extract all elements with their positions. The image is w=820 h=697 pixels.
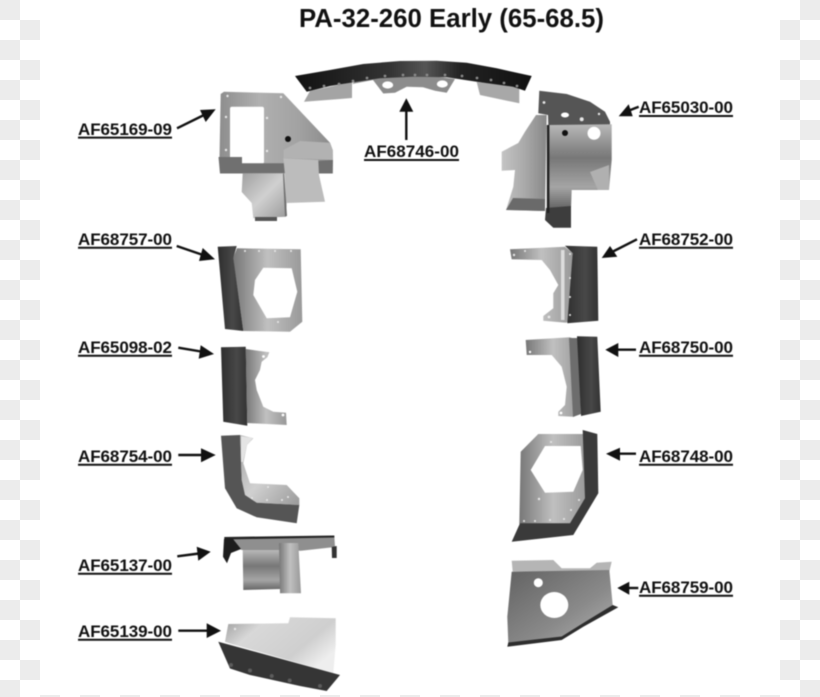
label: AF68757-00 — [78, 230, 172, 249]
label: AF68748-00 — [639, 447, 733, 466]
callout: AF65030-00 — [502, 91, 733, 228]
callout: AF68754-00 — [78, 435, 299, 523]
label: AF65139-00 — [78, 622, 172, 641]
part image: AF65098-02 — [221, 347, 287, 426]
part image: AF65137-00 — [223, 536, 337, 593]
label: AF65137-00 — [78, 556, 172, 575]
callout: AF68748-00 — [512, 430, 733, 542]
callout: AF65169-09 — [78, 92, 333, 221]
arrow — [177, 246, 215, 261]
arrow — [399, 98, 413, 140]
part image: AF68748-00 — [512, 430, 598, 542]
callout: AF68746-00 — [295, 61, 532, 161]
part image: AF68754-00 — [221, 435, 299, 523]
callout: AF68759-00 — [507, 560, 733, 647]
part image: AF65169-09 — [218, 92, 333, 221]
callout: AF68750-00 — [526, 336, 733, 417]
arrow — [177, 547, 211, 561]
arrow — [178, 623, 221, 638]
callout: AF65098-02 — [78, 338, 287, 426]
label: AF68754-00 — [78, 447, 172, 466]
arrow — [178, 345, 214, 359]
callout: AF65137-00 — [78, 536, 337, 593]
title: PA-32-260 Early (65-68.5) — [299, 5, 604, 33]
arrow — [602, 239, 637, 258]
part image: AF68752-00 — [510, 246, 598, 323]
part image: AF68746-00 — [295, 61, 532, 103]
label: AF65098-02 — [78, 338, 172, 357]
arrow — [177, 109, 216, 128]
part image: AF65030-00 — [502, 91, 612, 228]
arrow — [605, 343, 636, 357]
part image: AF65139-00 — [218, 617, 340, 691]
label: AF65169-09 — [78, 120, 172, 139]
part image: AF68759-00 — [507, 560, 618, 647]
part image: AF68750-00 — [526, 336, 601, 417]
label: AF65030-00 — [639, 98, 733, 117]
callout: AF65139-00 — [78, 617, 340, 691]
label: AF68746-00 — [364, 142, 459, 161]
arrow — [178, 448, 216, 462]
label: AF68752-00 — [639, 230, 733, 249]
arrow — [619, 104, 639, 116]
callout: AF68757-00 — [78, 230, 302, 332]
arrow — [606, 448, 636, 461]
part image: AF68757-00 — [218, 246, 302, 332]
label: AF68759-00 — [639, 578, 733, 597]
callout: AF68752-00 — [510, 230, 733, 323]
label: AF68750-00 — [639, 338, 733, 357]
arrow — [617, 582, 638, 595]
